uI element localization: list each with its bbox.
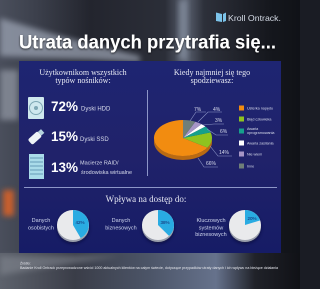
legend: Nie wiem	[247, 152, 262, 156]
pie labels	[194, 107, 230, 167]
impact: personal data: Danych	[32, 218, 50, 224]
stat: RAID: środowiska wirtualne	[81, 170, 132, 176]
right heading: spodziewasz:	[191, 76, 233, 85]
impact: key systems: 20%	[247, 216, 257, 221]
pie labels: 4%	[213, 107, 221, 113]
horizontal divider	[24, 187, 277, 188]
panel: main	[19, 61, 281, 253]
impact: business data: biznesowych	[105, 226, 137, 232]
title: Utrata danych przytrafia się...	[19, 32, 276, 54]
icon: hard disk	[28, 97, 44, 119]
stat: SSD: Dyski SSD	[80, 137, 109, 143]
impact: business data	[105, 210, 174, 244]
stat: SSD	[28, 128, 109, 145]
stat: RAID	[29, 154, 132, 179]
pie labels: 14%	[219, 150, 230, 156]
stat: HDD: Dyski HDD	[81, 106, 111, 112]
logo: Kroll Ontrack: Kroll Ontrack.	[228, 13, 281, 23]
pie labels: 66%	[206, 161, 217, 167]
impact: key systems	[195, 210, 261, 244]
legend: Awaria	[247, 127, 259, 131]
impact: business data: Danych	[112, 218, 130, 224]
stat: HDD: 72%	[51, 99, 78, 114]
left heading: typów nośników:	[55, 76, 111, 85]
icon: flash drive	[28, 128, 45, 145]
source note: Źródło:	[20, 260, 31, 266]
stat: SSD: 15%	[51, 129, 78, 144]
impact: personal data	[28, 210, 89, 244]
leader lines	[190, 112, 232, 167]
legend: oprogramowania	[247, 131, 275, 135]
left heading: Użytkownikom wszystkich	[39, 68, 127, 77]
right heading: Kiedy najmniej się tego	[174, 68, 250, 77]
impact: personal data: osobistych	[28, 226, 54, 232]
legend: Błąd człowieka	[247, 118, 272, 122]
impact: key systems: Kluczowych	[196, 218, 226, 224]
legend: Inne	[247, 164, 254, 168]
source note: Badanie Kroll Ontrack przeprowadzone wśród 1000 aktualnych klientów na całym świecie, dotyczące przypadków utraty danych i ich wpływu na bieżące działania	[20, 266, 278, 270]
stat: RAID: 13%	[51, 160, 78, 175]
stat: RAID: Macierze RAID/	[80, 160, 119, 166]
legend	[239, 106, 275, 168]
bottom heading: Wpływa na dostęp do:	[106, 194, 186, 204]
legend: Awaria zasilania	[247, 142, 275, 146]
pie labels: 6%	[220, 129, 228, 135]
icon: server rack	[29, 154, 44, 179]
vertical divider	[147, 90, 148, 176]
impact: personal data: 42%	[75, 220, 85, 225]
impact: business data: 38%	[160, 220, 170, 225]
pie labels: 3%	[215, 118, 223, 124]
pie labels: 7%	[194, 107, 202, 113]
stat: HDD	[28, 97, 111, 119]
impact: key systems: biznesowych	[195, 232, 227, 238]
legend: Usterka napędu	[247, 106, 273, 110]
impact: key systems: systemów	[199, 226, 223, 232]
pie chart: when	[154, 107, 232, 167]
